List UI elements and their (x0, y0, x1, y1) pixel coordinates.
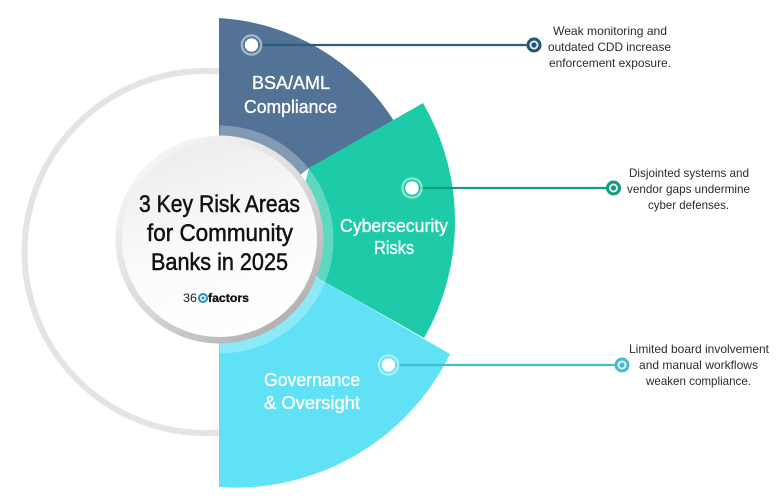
title: Banks in 2025 (151, 249, 288, 276)
panel: BSA/AML Compliance sector (219, 18, 394, 240)
panel: Governance and Oversight sector (219, 240, 450, 488)
text block: BSA/AML note (548, 24, 671, 70)
text block: BSA/AML note: outdated CDD increase (548, 40, 671, 54)
connector: BSA/AML (242, 35, 540, 55)
label: BSA/AML Compliance: BSA/AML (252, 73, 330, 93)
logo: 360factors: factors (208, 291, 249, 305)
icon: Governance end node (616, 359, 628, 371)
text block: BSA/AML note: Weak monitoring and (553, 24, 667, 38)
connector: Governance (379, 355, 628, 375)
icon: BSA/AML start node (242, 35, 261, 55)
icon: Cybersecurity start node (402, 178, 422, 198)
label: Cybersecurity Risks: Risks (374, 238, 414, 258)
icon: Governance start node (379, 355, 398, 375)
text block: Cybersecurity note: vendor gaps undermine (627, 182, 750, 196)
label: Governance and Oversight: Governance (264, 370, 360, 390)
title: 3 Key Risk Areas (139, 191, 300, 218)
center badge (116, 136, 324, 344)
logo: 360factors: 36 (183, 293, 197, 305)
text block: Governance note: and manual workflows (639, 358, 758, 372)
title: for Community (147, 220, 293, 247)
center halo (220, 126, 334, 354)
connector: Cybersecurity (402, 178, 620, 198)
text block: Cybersecurity note: Disjointed systems and (629, 166, 749, 180)
title (139, 191, 300, 276)
decorative outer ring (25, 71, 219, 433)
text block: Cybersecurity note: cyber defenses. (648, 198, 729, 212)
text block: BSA/AML note: enforcement exposure. (549, 56, 671, 70)
text block: Governance note (629, 342, 770, 388)
label: Governance and Oversight (264, 370, 360, 413)
text block: Governance note: weaken compliance. (645, 374, 751, 388)
label: Cybersecurity Risks: Cybersecurity (340, 216, 448, 236)
panel: Cybersecurity Risks sector (290, 103, 455, 338)
logo: 360factors (183, 291, 249, 305)
icon: Cybersecurity end node (608, 182, 620, 194)
icon: BSA/AML end node (528, 39, 540, 51)
label: Governance and Oversight: & Oversight (264, 393, 360, 413)
label: Cybersecurity Risks (340, 216, 448, 258)
text block: Cybersecurity note (627, 166, 750, 212)
label: BSA/AML Compliance: Compliance (244, 97, 337, 117)
text block: Governance note: Limited board involvement (629, 342, 770, 356)
label: BSA/AML Compliance (244, 73, 337, 117)
